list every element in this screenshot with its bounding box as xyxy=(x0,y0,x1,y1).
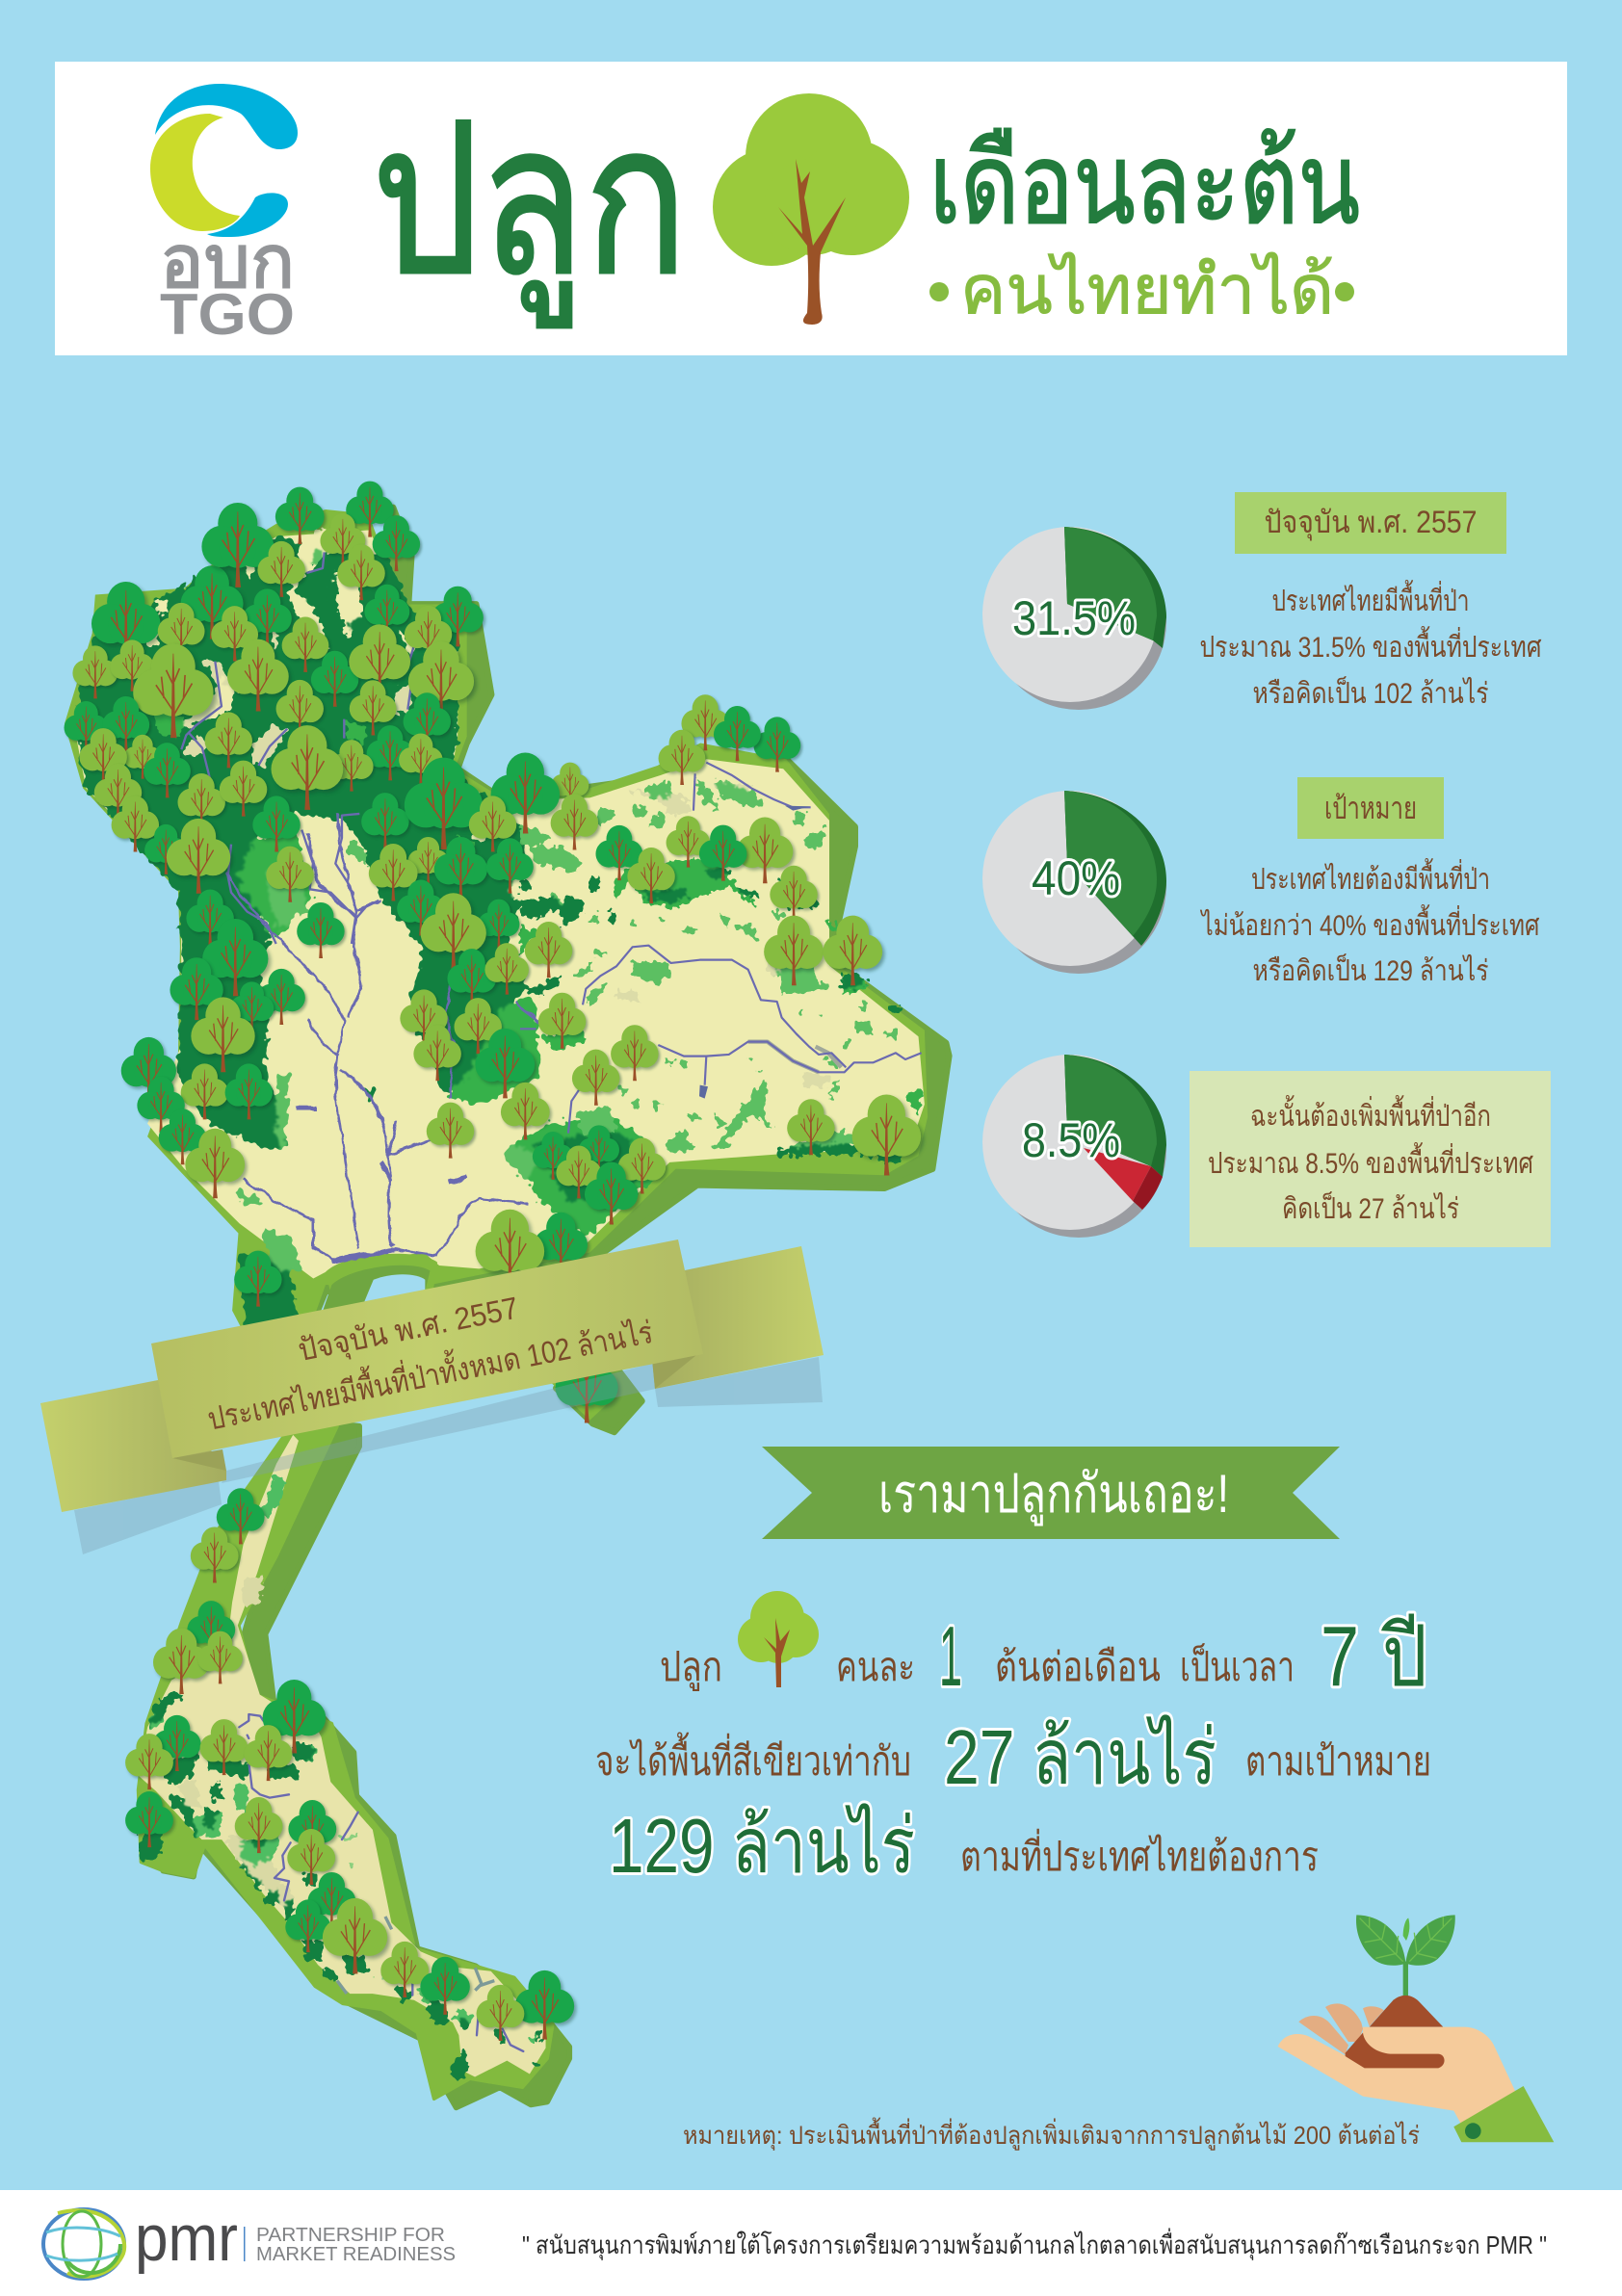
panel: pie target xyxy=(982,777,1539,987)
banner: let's plant xyxy=(762,1447,1340,1539)
logo: TGO: TGO xyxy=(160,282,295,347)
text: current forest: ประเทศไทยมีพื้นที่ป่า xyxy=(1271,580,1470,617)
line 3 xyxy=(609,1803,1319,1889)
header panel xyxy=(55,62,1567,355)
line 3: 129 ล้านไร่ xyxy=(609,1803,915,1889)
logo: pmr wordmark: PARTNERSHIP FOR xyxy=(256,2225,445,2246)
logo: pmr wordmark: pmr xyxy=(135,2202,238,2275)
line 1: ปี xyxy=(1381,1608,1427,1704)
footer xyxy=(0,2190,1622,2296)
hand xyxy=(1278,2027,1515,2124)
ribbon right tail xyxy=(652,1246,824,1389)
ribbon text: ประเทศไทยมีพื้นที่ป่าทั้งหมด 102 ล้านไร่ xyxy=(204,1310,656,1437)
icon: title tree xyxy=(713,93,909,325)
line 1: ต้นต่อเดือน xyxy=(995,1644,1161,1689)
logo: pmr wordmark xyxy=(135,2202,456,2275)
note: หมายเหตุ: ประเมินพื้นที่ป่าที่ต้องปลูกเพิ่มเติมจากการปลูกต้นไม้ 200 ต้นต่อไร่ xyxy=(683,2117,1420,2151)
map of Thailand xyxy=(65,482,949,2107)
line 1: 7 xyxy=(1321,1608,1359,1704)
line 1: 1 xyxy=(939,1608,962,1704)
line 1: คนละ xyxy=(836,1644,915,1689)
logo: TGO: อบก xyxy=(160,222,295,303)
line 2: 27 ล้านไร่ xyxy=(944,1714,1216,1800)
label: target xyxy=(1297,777,1444,839)
peninsula base xyxy=(139,1423,569,2107)
line 3: ตามที่ประเทศไทยต้องการ xyxy=(960,1829,1319,1879)
pie chart 31.5%: 31.5% xyxy=(1012,591,1136,645)
text: target forest: หรือคิดเป็น 129 ล้านไร่ xyxy=(1252,952,1489,987)
logo: pmr wordmark: MARKET READINESS xyxy=(256,2244,456,2265)
line 2 xyxy=(595,1714,1431,1800)
fingers xyxy=(1298,2003,1384,2054)
panel: pie current xyxy=(982,492,1541,710)
pie chart 31.5% xyxy=(982,527,1166,710)
north forest detail xyxy=(144,527,536,944)
ribbon text: ปัจจุบัน พ.ศ. 2557 xyxy=(295,1291,521,1370)
subtitle: คนไทยทำได้ xyxy=(960,252,1334,327)
cuff xyxy=(1453,2086,1554,2142)
pie chart 8.5%: 8.5% xyxy=(1022,1113,1120,1167)
line 1: ปลูก xyxy=(660,1644,722,1691)
ribbon band xyxy=(151,1239,703,1458)
text: current forest xyxy=(1200,580,1541,710)
line 1 xyxy=(660,1591,1427,1704)
ribbon: current forest area xyxy=(40,1239,824,1554)
text: current forest: ประมาณ 31.5% ของพื้นที่ประเทศ xyxy=(1200,626,1541,664)
title: plant: ปลูก xyxy=(372,84,688,327)
label: target: เป้าหมาย xyxy=(1324,791,1417,825)
title: one tree per month: เดือนละต้น xyxy=(929,121,1360,247)
banner: let's plant: เรามาปลูกกันเถอะ! xyxy=(878,1463,1229,1526)
north and central base xyxy=(65,508,949,1432)
text: target forest: ประเทศไทยต้องมีพื้นที่ป่า xyxy=(1251,858,1490,896)
logo: TGO xyxy=(150,84,298,347)
line 2: จะได้พื้นที่สีเขียวเท่ากับ xyxy=(595,1732,911,1784)
pie chart 40% xyxy=(982,791,1166,974)
logo: PMR globe xyxy=(43,2209,124,2279)
panel: pie gap xyxy=(982,1055,1551,1247)
icon: small tree xyxy=(738,1591,819,1687)
peninsula forest detail xyxy=(140,1692,542,2083)
seedling xyxy=(1356,1915,1455,2002)
soil in palm xyxy=(1346,2033,1445,2068)
callout: gap: คิดเป็น 27 ล้านไร่ xyxy=(1282,1190,1459,1225)
pie chart 8.5% xyxy=(982,1055,1166,1238)
ribbon shadows xyxy=(74,1351,823,1554)
text: target forest: ไม่น้อยกว่า 40% ของพื้นที่ประเทศ xyxy=(1200,904,1539,942)
text: current forest: หรือคิดเป็น 102 ล้านไร่ xyxy=(1252,675,1489,710)
pie chart 40%: 40% xyxy=(1032,851,1120,905)
line 2: ตามเป้าหมาย xyxy=(1245,1738,1431,1784)
line 1: เป็นเวลา xyxy=(1180,1643,1295,1689)
label: current year xyxy=(1235,492,1506,554)
north, central and north-east trees xyxy=(65,482,924,1422)
ribbon left tail xyxy=(40,1380,226,1512)
peninsula and south-east trees xyxy=(125,1248,577,2041)
soil mound xyxy=(1370,1996,1443,2027)
label: current year: ปัจจุบัน พ.ศ. 2557 xyxy=(1264,505,1478,541)
cuff button xyxy=(1465,2123,1481,2139)
isaan forest and river detail xyxy=(520,763,922,1163)
callout: gap xyxy=(1190,1071,1551,1247)
text: call to action xyxy=(595,1591,1431,1889)
callout: gap: ฉะนั้นต้องเพิ่มพื้นที่ป่าอีก xyxy=(1250,1095,1491,1133)
callout: gap: ประมาณ 8.5% ของพื้นที่ประเทศ xyxy=(1208,1142,1533,1180)
icon: hand holding seedling xyxy=(1278,1915,1554,2142)
text: target forest xyxy=(1200,858,1539,987)
ribbon text xyxy=(195,1265,656,1437)
